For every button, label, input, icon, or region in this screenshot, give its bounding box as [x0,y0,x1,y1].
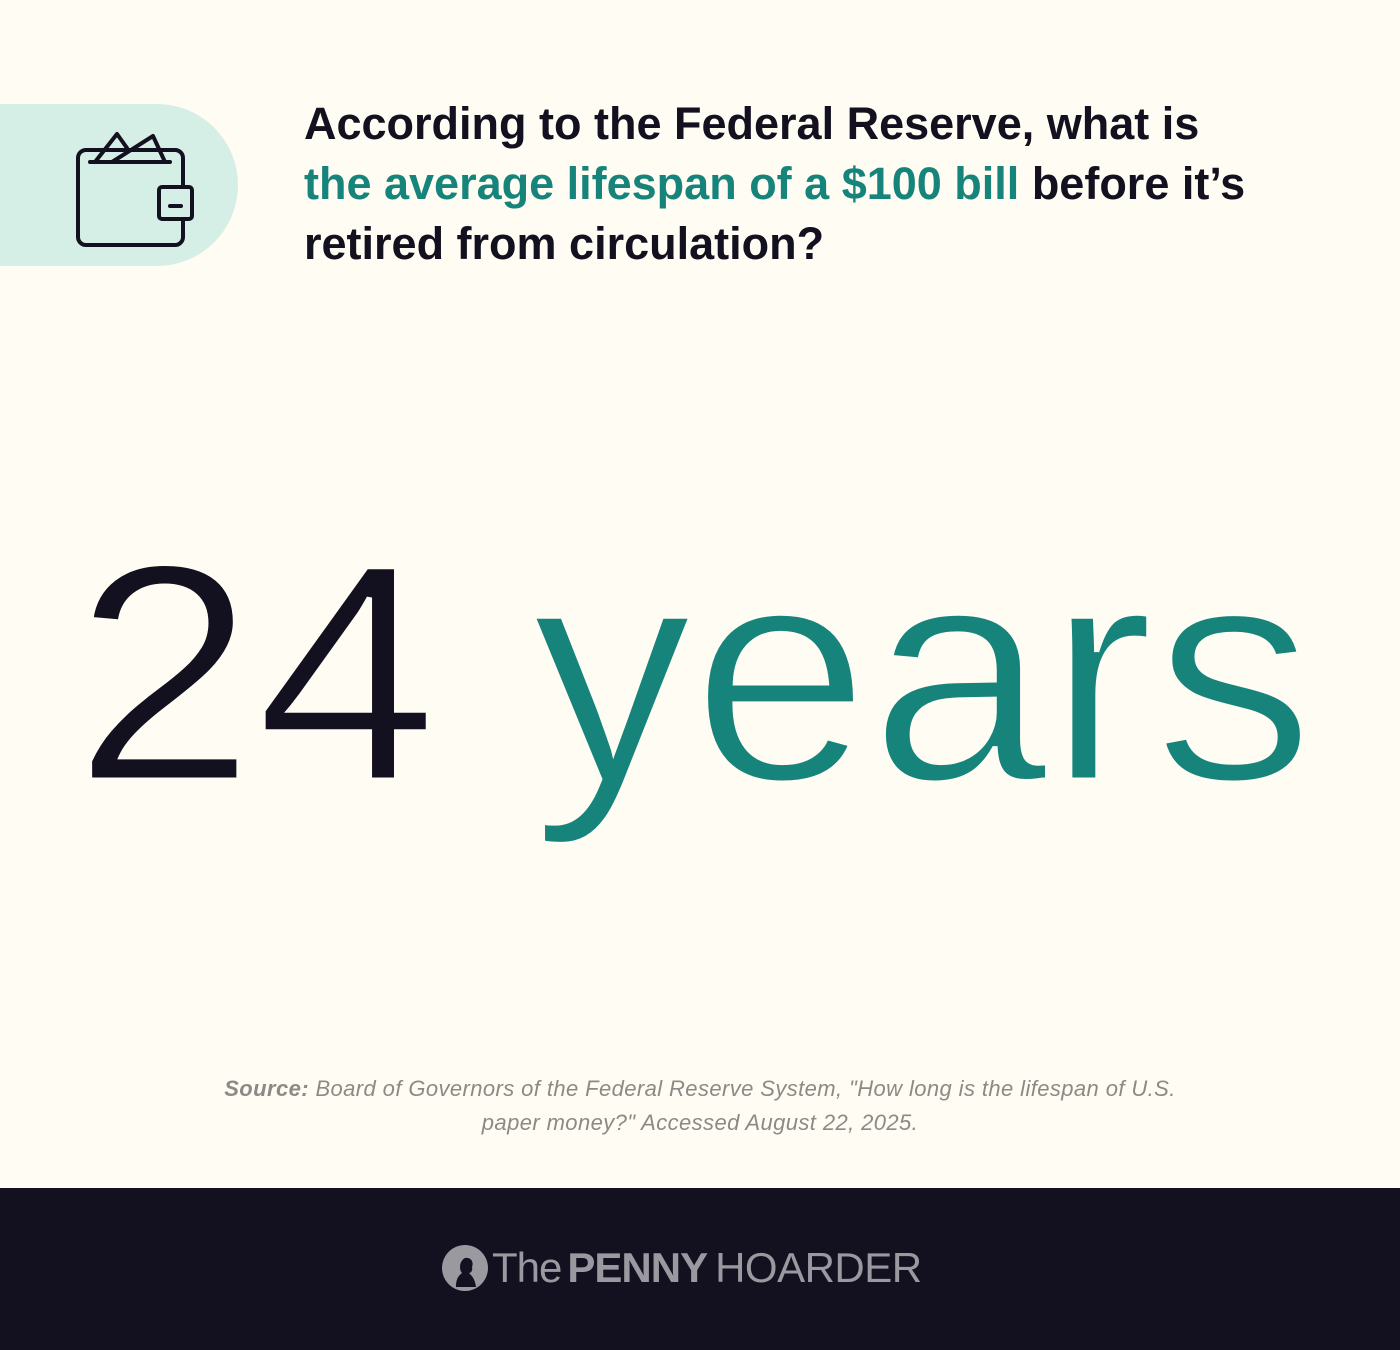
logo: The Penny Hoarder [442,1244,922,1291]
title question: the average lifespan of a $100 bill before it’s [304,158,1245,209]
icon badge: wallet [0,104,238,266]
source note [224,1076,1176,1135]
big answer: 24 years: 24 [73,500,438,846]
title question [304,98,1245,269]
logo: The Penny Hoarder: The [492,1244,561,1291]
big answer: 24 years: years [532,500,1314,848]
source note: paper money?" Accessed August 22, 2025. [482,1110,918,1135]
footer bar [0,1188,1400,1350]
source note: Source: Board of Governors of the Federal Reserve System, "How long is the lifespan of U.S. [224,1076,1176,1101]
title question: retired from circulation? [304,218,824,269]
big answer: 24 years [73,500,1314,848]
logo: The Penny Hoarder: PENNY [567,1244,707,1291]
logo: The Penny Hoarder: HOARDER [715,1244,922,1291]
icon: wallet [78,134,192,245]
icon: silhouette circle [442,1245,488,1291]
title question: According to the Federal Reserve, what is [304,98,1199,149]
